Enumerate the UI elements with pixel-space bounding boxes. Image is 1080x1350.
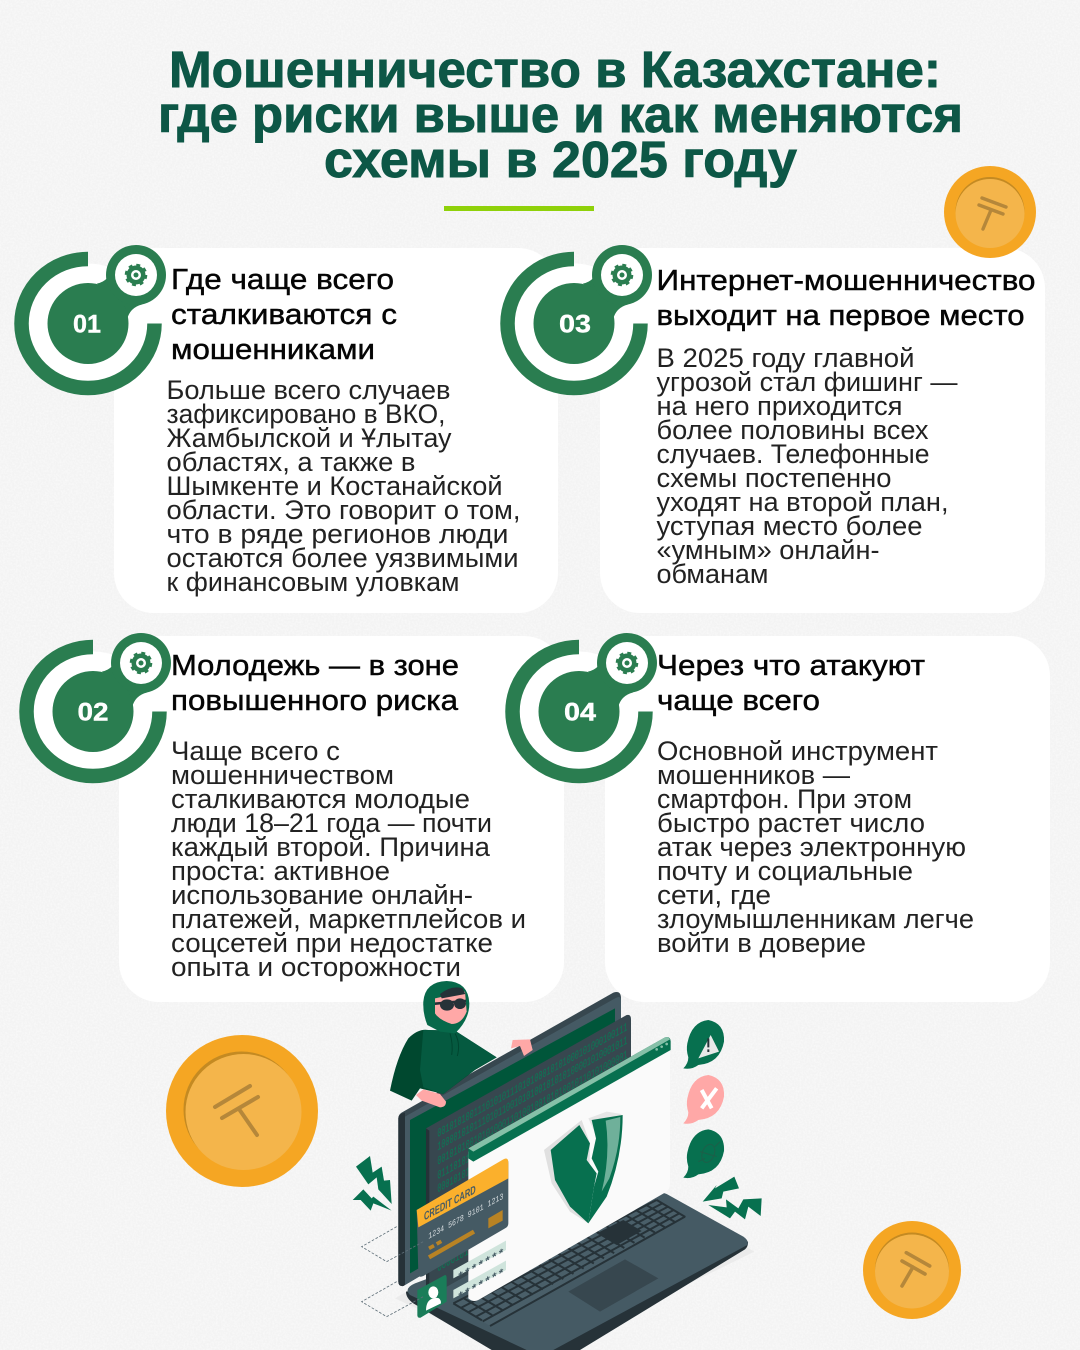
- heading: card 03: [656, 265, 1036, 332]
- monitor back panel: [398, 992, 621, 1286]
- password fields: *******: [458, 1265, 504, 1303]
- heading: card 01: мошенниками: [171, 334, 375, 366]
- text: card 03: [656, 343, 958, 589]
- icon: bug bubble: [683, 1129, 724, 1178]
- text: card 03: В 2025 году главной: [656, 343, 914, 373]
- icon: gear: [618, 654, 636, 672]
- text: card 04: сети, где: [657, 880, 771, 910]
- coin: left: [166, 1035, 318, 1187]
- hands: [416, 1089, 446, 1107]
- keyboard: [453, 1200, 685, 1326]
- binary text: 00101010010101000110100100101010010110101000001: [437, 1047, 627, 1169]
- text: card 04: злоумышленникам легче: [657, 904, 974, 934]
- text: card 01: областях, а также в: [166, 447, 416, 477]
- coin: top right: [944, 166, 1036, 258]
- icon: gear: [612, 266, 632, 284]
- password fields: *******: [458, 1245, 504, 1283]
- badge 02: [26, 633, 171, 776]
- text: card 03: на него приходится: [656, 391, 902, 421]
- icon: lightning left: [353, 1156, 392, 1211]
- shield: [544, 1112, 623, 1223]
- panel: card 02: [119, 636, 564, 1002]
- text: card 03: уступая место более: [656, 511, 922, 541]
- text: card 03: обманам: [656, 559, 768, 589]
- text: card 02: сталкиваются молодые: [171, 784, 470, 814]
- title: где риски выше и как меняются: [158, 86, 963, 143]
- icon: gear: [132, 654, 150, 672]
- badge 04: [512, 633, 657, 776]
- text: card 03: «умным» онлайн-: [656, 535, 880, 565]
- binary text: [437, 1020, 627, 1275]
- text: card 01: [166, 375, 520, 597]
- text: card 02: проста: активное: [171, 856, 390, 886]
- text: card 02: опыта и осторожности: [171, 952, 461, 982]
- number 02: 02: [78, 698, 108, 726]
- sunglasses: [435, 998, 466, 1011]
- text: card 04: Основной инструмент: [657, 736, 938, 766]
- badge 01: [22, 245, 166, 388]
- text: card 02: Чаще всего с: [171, 736, 340, 766]
- heading: card 04: Через что атакуют: [657, 650, 925, 682]
- face: [435, 992, 467, 1024]
- credit card: 1234 5678 9101 1213: [428, 1191, 503, 1242]
- text: card 02: платежей, маркетплейсов и: [171, 904, 526, 934]
- text: card 04: почту и социальные: [657, 856, 913, 886]
- laptop base: [406, 1193, 748, 1350]
- icon: lightning right: [703, 1177, 762, 1219]
- trackpad: [568, 1259, 658, 1312]
- number 01: 01: [73, 310, 101, 338]
- panel: card 03: [600, 248, 1045, 613]
- text: card 01: Шымкенте и Костанайской: [166, 471, 502, 501]
- binary text: 00101010011101010111010100010101000101000100111: [437, 1020, 627, 1141]
- dashed connectors: [362, 1227, 423, 1317]
- text: card 01: к финансовым уловкам: [166, 567, 460, 597]
- text: card 01: области. Это говорит о том,: [166, 495, 520, 525]
- title: Мошенничество в Казахстане:: [169, 41, 941, 98]
- title: [158, 41, 963, 188]
- drawstrings: [450, 1033, 459, 1056]
- heading: card 04: чаще всего: [657, 685, 820, 717]
- heading: card 02: повышенного риска: [171, 685, 459, 717]
- text: card 02: каждый второй. Причина: [171, 832, 491, 862]
- illustration: hacker at laptop: [353, 981, 762, 1350]
- heading: card 02: Молодежь — в зоне: [171, 650, 459, 682]
- number 03: 03: [559, 310, 591, 338]
- text: card 04: атак через электронную: [657, 832, 966, 862]
- title: схемы в 2025 году: [324, 131, 798, 188]
- text: card 04: [657, 736, 974, 958]
- binary text: 00010101010100010101010101011010100101010110101: [437, 1075, 627, 1196]
- hacker: [390, 981, 533, 1107]
- panel: card 04: [605, 636, 1050, 1002]
- credit card: CREDIT CARD: [424, 1182, 476, 1223]
- text: card 03: угрозой стал фишинг —: [656, 367, 958, 397]
- credit card: [417, 1159, 508, 1277]
- heading: card 02: [171, 650, 459, 717]
- window dots: [655, 1043, 668, 1051]
- code panel: [426, 1015, 631, 1298]
- number 04: 04: [564, 698, 596, 726]
- text: card 01: остаются более уязвимыми: [166, 543, 518, 573]
- binary text: 000010101: [437, 1239, 477, 1275]
- text: card 02: соцсетей при недостатке: [171, 928, 493, 958]
- text: card 03: более половины всех: [656, 415, 929, 445]
- icon: warning bubble: [683, 1020, 724, 1069]
- title underline: [444, 206, 594, 211]
- text: card 01: что в ряде регионов люди: [166, 519, 508, 549]
- heading: card 03: выходит на первое место: [656, 300, 1024, 332]
- text: card 03: схемы постепенно: [656, 463, 892, 493]
- heading: card 03: Интернет-мошенничество: [656, 265, 1036, 297]
- password fields: [453, 1241, 506, 1303]
- binary text: 10000101011101011001010100101010100001010001011: [437, 1033, 627, 1154]
- text: card 01: Жамбылской и Ұлытау: [166, 423, 452, 453]
- user tile: [417, 1275, 447, 1318]
- heading: card 01: [171, 264, 397, 366]
- coin: bottom right: [863, 1221, 961, 1319]
- hood: [423, 981, 469, 1033]
- laptop shadow: [395, 1203, 754, 1350]
- icon: error bubble: [683, 1075, 724, 1124]
- text: card 01: Больше всего случаев: [166, 375, 450, 405]
- heading: card 01: сталкиваются с: [171, 299, 397, 331]
- badge 03: [508, 245, 652, 388]
- text: card 04: войти в доверие: [657, 928, 866, 958]
- text: card 04: мошенников —: [657, 760, 850, 790]
- text: card 01: зафиксировано в ВКО,: [166, 399, 446, 429]
- text: card 02: мошенничеством: [171, 760, 394, 790]
- heading: card 04: [657, 650, 925, 717]
- icon: gear: [126, 266, 146, 284]
- heading: card 01: Где чаще всего: [171, 264, 394, 296]
- hoodie body: [390, 1030, 497, 1101]
- text: card 02: люди 18–21 года — почти: [171, 808, 492, 838]
- text: card 03: случаев. Телефонные: [656, 439, 930, 469]
- panel: card 01: [114, 248, 558, 613]
- text: card 04: быстро растет число: [657, 808, 925, 838]
- binary text: 01110101101010100101011110101010100101010011010: [437, 1062, 627, 1183]
- text: card 02: [171, 736, 526, 982]
- text: card 03: уходят на второй план,: [656, 487, 948, 517]
- text: card 04: смартфон. При этом: [657, 784, 912, 814]
- text: card 02: использование онлайн-: [171, 880, 473, 910]
- browser window: [468, 1037, 671, 1301]
